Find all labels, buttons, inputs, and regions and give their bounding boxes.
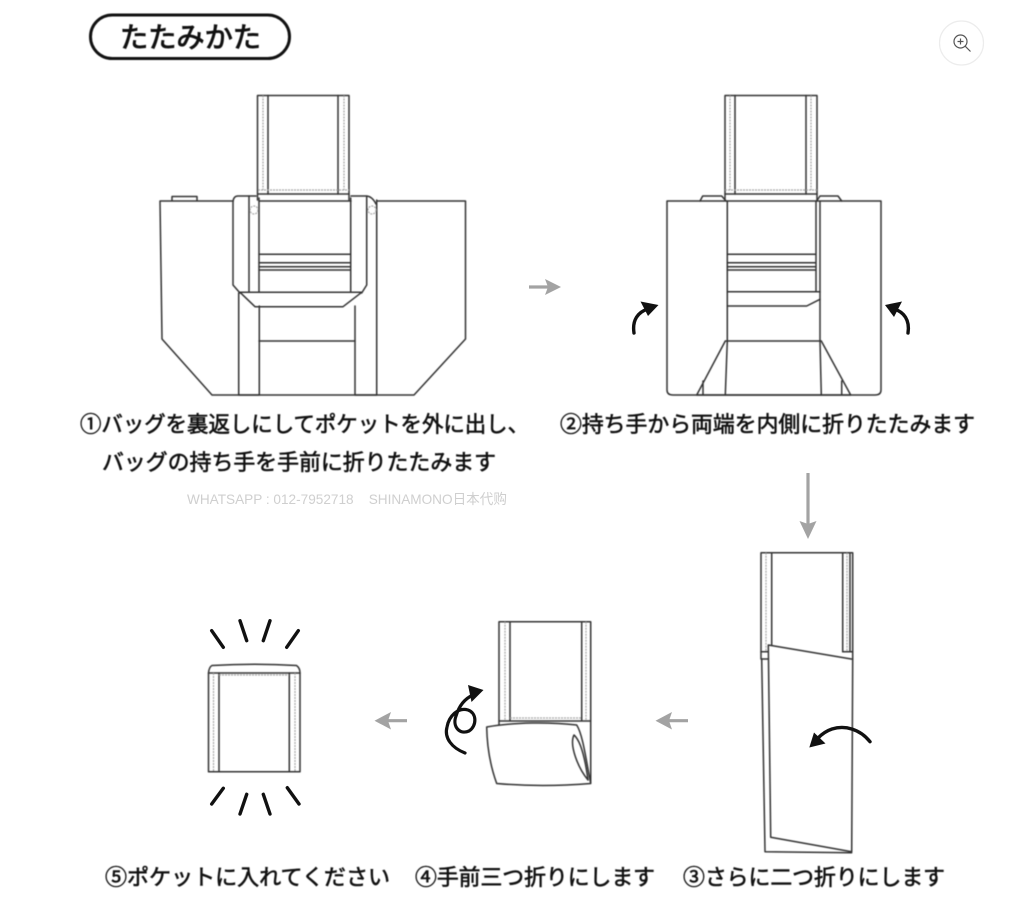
step 1: opened bag illustration — [160, 96, 466, 395]
step 2 caption: ②持ち手から両端を内側に折りたたみます — [560, 412, 975, 437]
step 3: folded in half illustration — [761, 553, 853, 853]
step 4: tri-fold illustration — [487, 622, 591, 785]
step 5 caption: ⑤ポケットに入れてください — [105, 865, 390, 890]
title badge — [90, 15, 290, 58]
arrow: step 4 to step 5 — [374, 712, 407, 730]
arrow: left fold curve — [634, 302, 658, 333]
step 5: finished pouch illustration — [208, 664, 300, 772]
icon: zoom button — [940, 21, 984, 65]
sparkle rays — [212, 621, 299, 814]
step 2: sides folded bag illustration — [667, 96, 881, 395]
arrow: spiral roll — [446, 685, 484, 753]
step 1 caption: バッグの持ち手を手前に折りたたみます — [102, 450, 496, 475]
step 3 caption: ③さらに二つ折りにします — [683, 865, 945, 890]
step 4 caption: ④手前三つ折りにします — [415, 865, 655, 890]
arrow: half fold curve — [809, 728, 870, 748]
arrow: step 3 to step 4 — [656, 712, 688, 730]
step 1 caption — [80, 412, 529, 475]
step 1 caption: ①バッグを裏返しにしてポケットを外に出し、 — [80, 412, 529, 437]
arrow: step 1 to step 2 — [529, 279, 561, 295]
title badge: たたみかた — [120, 22, 261, 53]
arrow: right fold curve — [885, 302, 908, 333]
watermark: WHATSAPP : 012-7952718 SHINAMONO日本代购 — [187, 491, 507, 507]
arrow: step 2 to step 3 — [800, 473, 816, 539]
